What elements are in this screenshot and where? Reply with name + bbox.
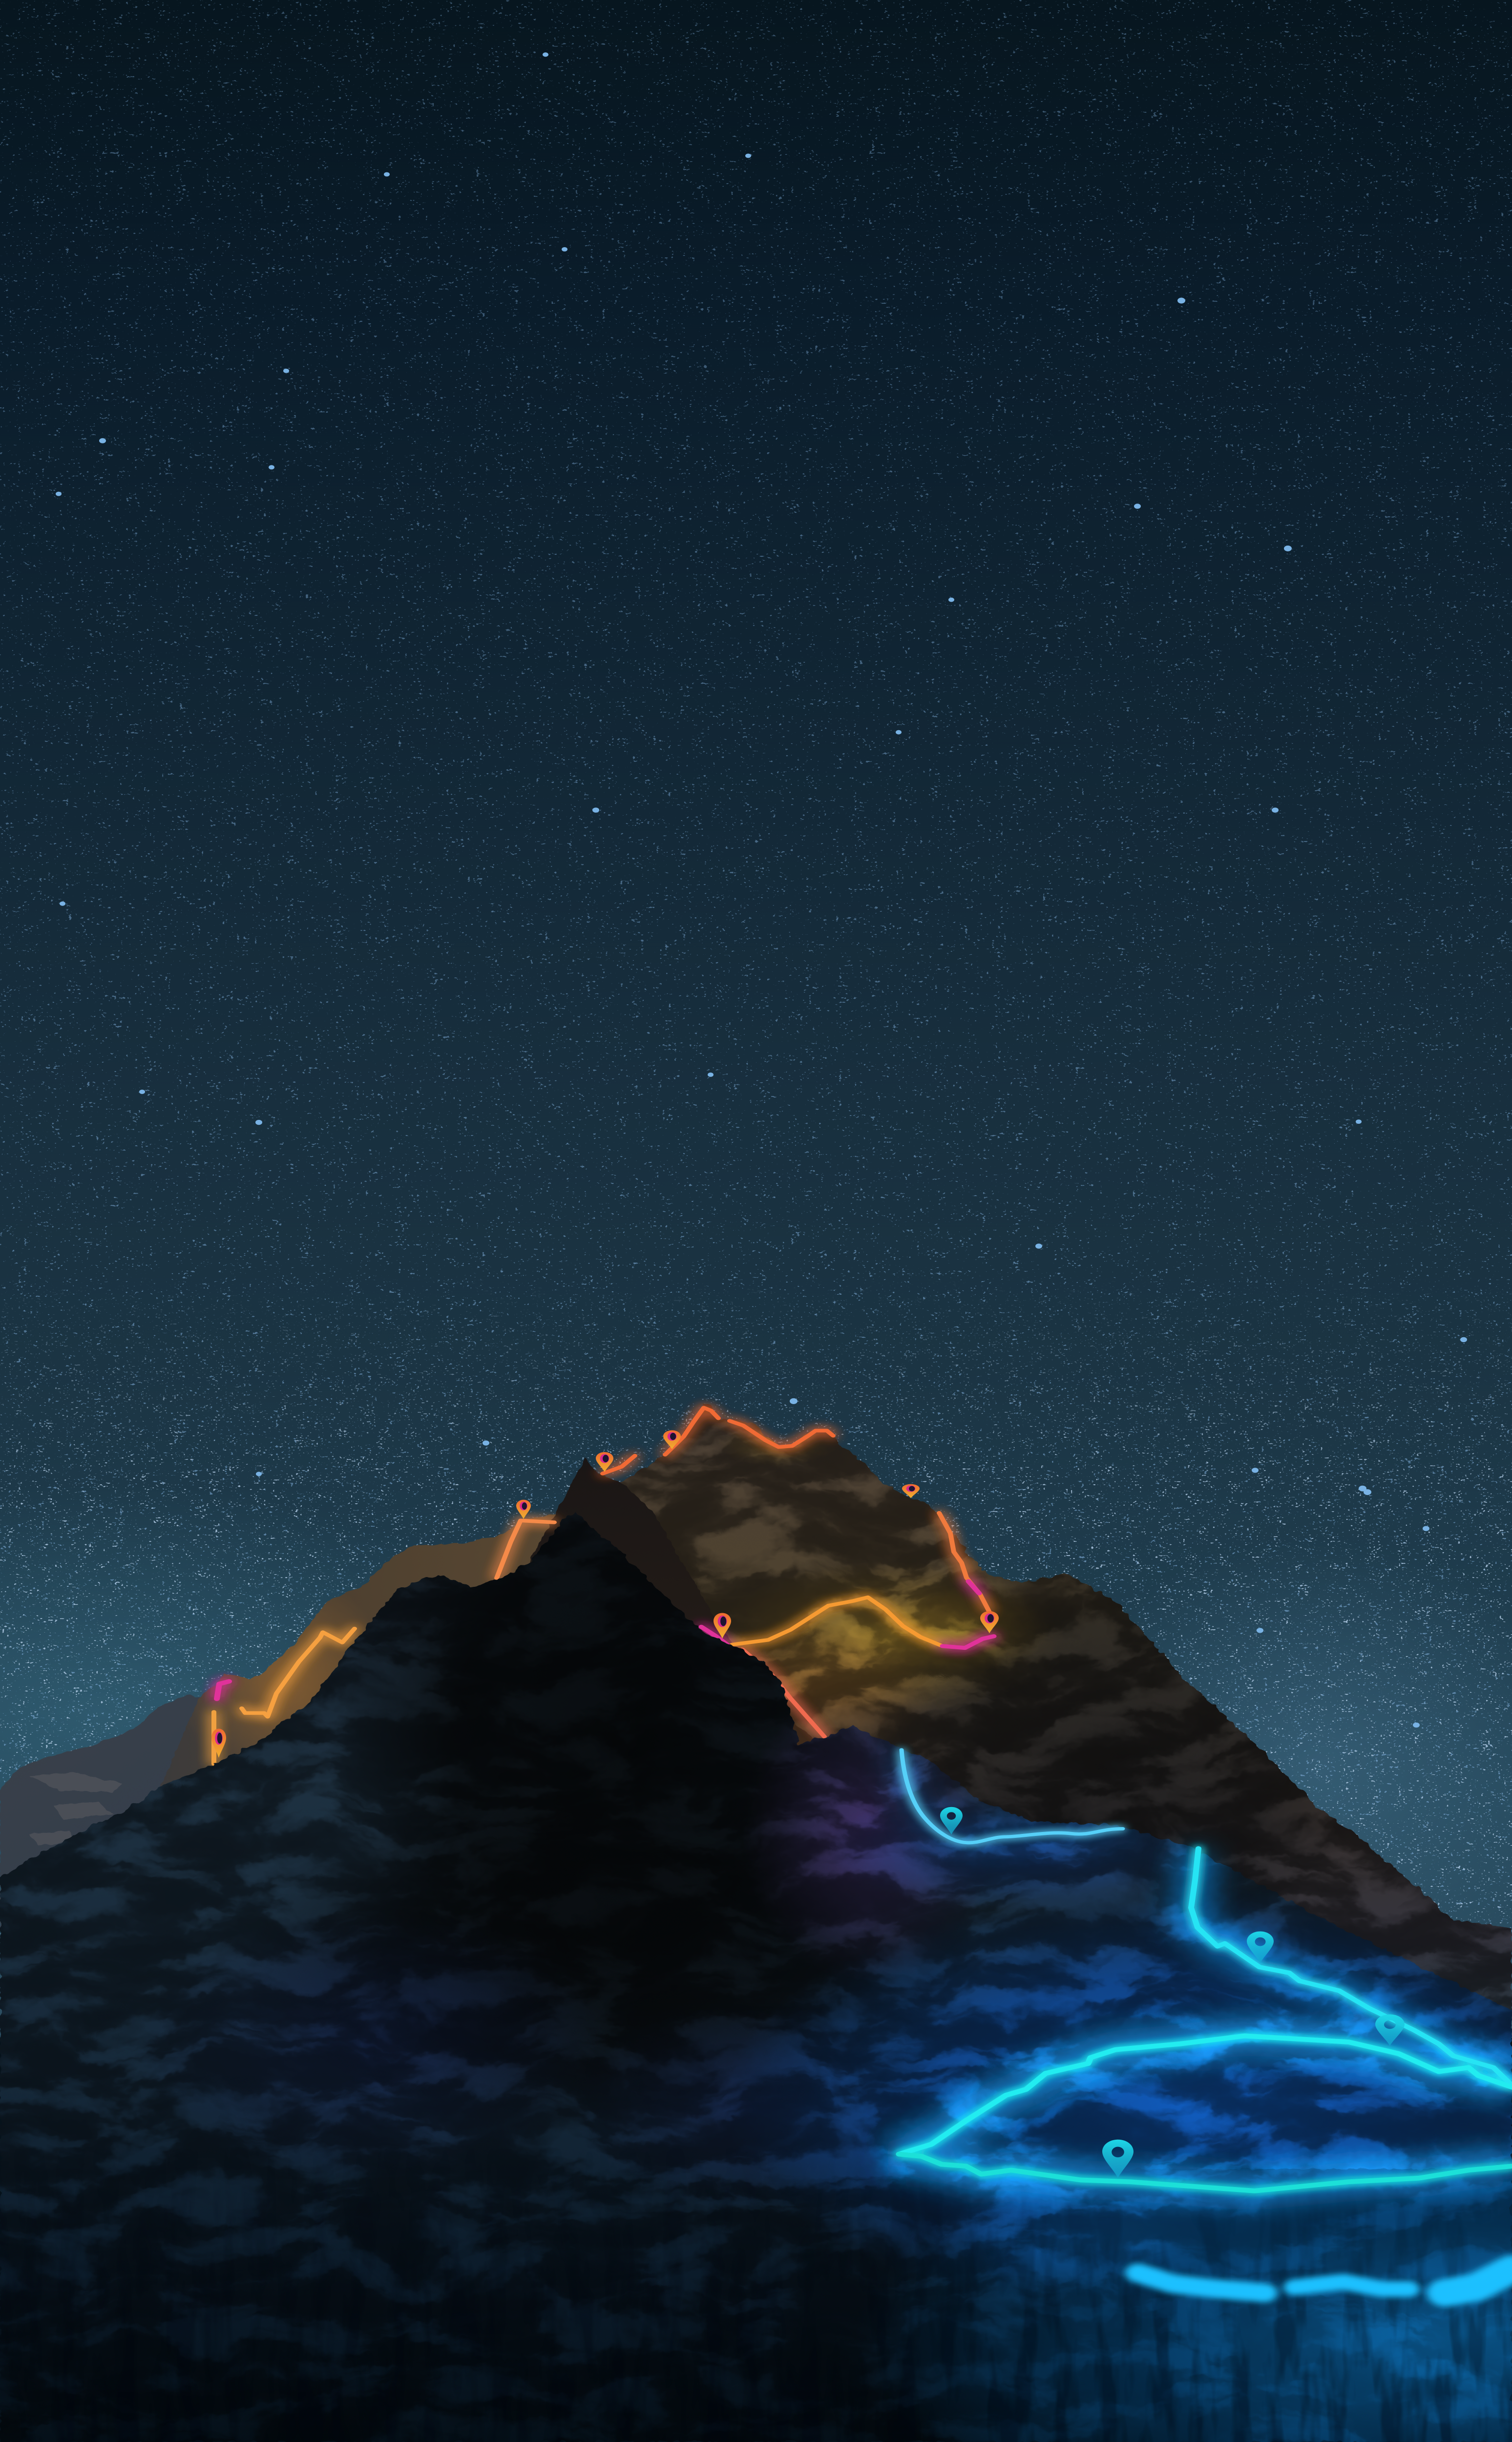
amber-lit ridge on the left xyxy=(147,1514,635,1893)
horizon haze on the left xyxy=(0,1485,586,1936)
dark underlay at the base of the front mountain xyxy=(0,2038,1512,2442)
route: right descent xyxy=(1191,1849,1512,2085)
pin: shoulder xyxy=(596,1452,613,1472)
gold glow under the traverse xyxy=(713,1561,1065,1714)
bright glowing band along the lower slope xyxy=(1138,2269,1512,2293)
smooth blue wash over the foot of the mountain xyxy=(684,2169,1512,2442)
rear massif lit in amber xyxy=(559,1403,1512,2074)
blue glowing routes xyxy=(899,1750,1512,2191)
spill: basin lower line xyxy=(899,2154,1512,2191)
pin: basin centre xyxy=(1102,2140,1134,2178)
route: magenta stretch by the traverse start xyxy=(701,1627,728,1645)
far hill on the left xyxy=(0,1695,342,1929)
dark central shadow xyxy=(342,1419,889,2074)
orange map pins xyxy=(211,1430,999,1758)
deep blue tint in the centre basin xyxy=(567,2005,938,2209)
horizon haze along the right slope xyxy=(1045,1539,1512,1991)
soft light spilling from the blue routes xyxy=(899,1849,1512,2191)
route: magenta stretch on the right face xyxy=(968,1581,979,1593)
spill: basin upper arc xyxy=(899,2036,1512,2154)
dense star field near the horizon xyxy=(0,1274,1512,1965)
route: middle traverse xyxy=(732,1597,994,1648)
spill: right descent xyxy=(1191,1849,1512,2085)
purple glow by the upper blue route xyxy=(742,1678,996,1983)
deep blue tint in the left basin xyxy=(137,1907,606,2184)
route: basin upper arc xyxy=(899,2036,1512,2154)
glow along the basin upper arc xyxy=(899,2036,1512,2154)
blue wash at the foot of the mountain xyxy=(684,2169,1512,2442)
pin: upper traverse xyxy=(940,1807,963,1834)
blue basin glow xyxy=(684,1885,1512,2344)
streaked shadow at the foot of the mountain xyxy=(0,2147,1512,2442)
gold glow by the lower descent xyxy=(664,1620,938,1758)
route: magenta stretch by the traverse end xyxy=(943,1636,994,1648)
blue map pins xyxy=(940,1807,1405,2178)
route: upper blue traverse xyxy=(902,1750,1123,1843)
band: left xyxy=(1138,2273,1265,2293)
pin: traverse end xyxy=(980,1611,999,1633)
route: magenta far left top xyxy=(217,1682,229,1699)
pale snow patches on the far hill xyxy=(29,1772,122,1845)
front mountain with blue-lit terrain xyxy=(0,1419,1512,2442)
pin: summit left xyxy=(663,1430,681,1449)
shaded right flank xyxy=(869,1536,1377,1973)
pin: traverse start xyxy=(714,1613,731,1639)
route: upper left climb xyxy=(497,1520,554,1578)
dark lower central shadow xyxy=(244,1798,977,2133)
pin: upper right xyxy=(902,1484,920,1498)
glow along the basin lower line xyxy=(899,2154,1512,2191)
band: middle xyxy=(1294,2282,1409,2289)
blue glow under the upper route xyxy=(825,1787,1236,1911)
pin: basin right xyxy=(1375,2014,1405,2046)
glow along the upper traverse xyxy=(902,1750,1123,1843)
route: left ridge xyxy=(242,1629,355,1717)
middle ridge in front of the massif xyxy=(488,1458,825,1820)
gold glow by the pin at the traverse end xyxy=(874,1587,1050,1674)
route: far left edge xyxy=(211,1712,216,1764)
glow along the right descent xyxy=(1191,1849,1512,2085)
pin: upper left xyxy=(516,1500,531,1519)
amber route sections on the rear slopes xyxy=(214,1408,994,1764)
route: lower descent xyxy=(742,1649,824,1737)
bright stars xyxy=(56,52,1467,1727)
band: right xyxy=(1446,2269,1512,2293)
gold glow on the summit saddle xyxy=(718,1423,835,1467)
pool of light below the basin line xyxy=(947,2173,1299,2296)
route: basin lower line xyxy=(899,2154,1512,2191)
route: summit ridge xyxy=(603,1408,833,1474)
warm glow on the left ridge xyxy=(176,1572,391,1790)
pin: right descent xyxy=(1247,1932,1274,1963)
pin: far left xyxy=(211,1728,226,1758)
route: right face xyxy=(939,1513,989,1611)
